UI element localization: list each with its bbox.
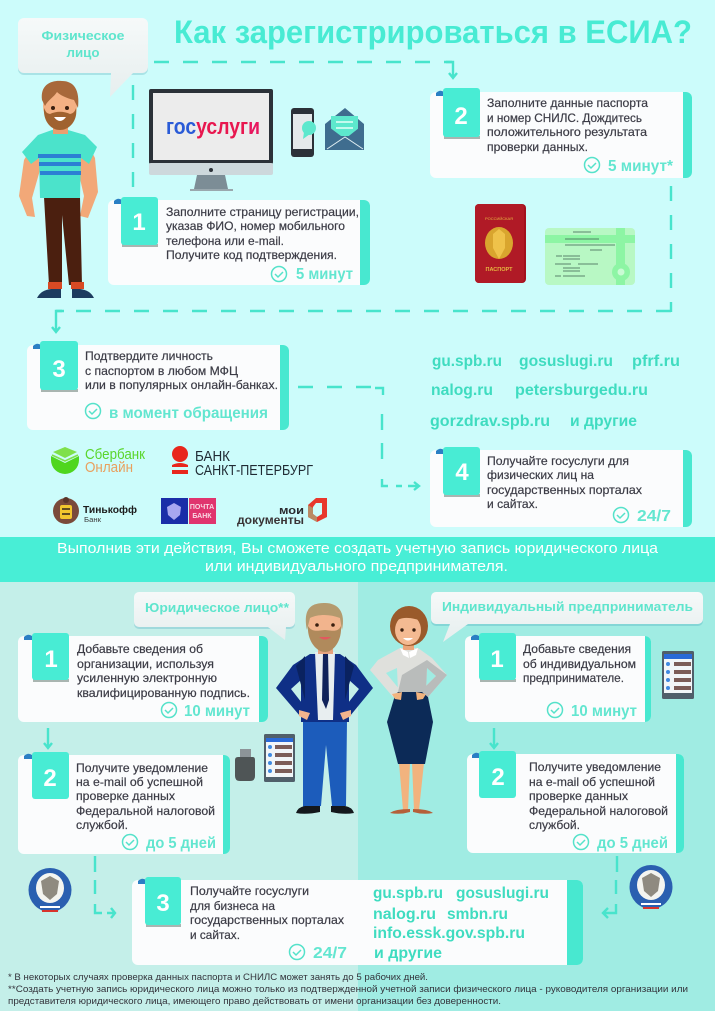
logo: Bank Saint Petersburg: САНКТ-ПЕТЕРБУРГ	[195, 462, 313, 479]
logo: Tinkoff Bank	[53, 497, 137, 524]
panel: step 1: Заполните страницу регистрации,	[166, 205, 359, 219]
list: portals for individuals	[430, 353, 680, 430]
panel: entrepreneur step 1: предпринимателе.	[523, 671, 624, 685]
time: 5 minutes	[272, 266, 353, 283]
panel: legal entity step 2: Получите уведомление	[76, 761, 208, 775]
list: portals for business: и другие	[374, 945, 442, 962]
banner	[0, 537, 715, 582]
footnotes: представителя юридического лица, имеющего право действовать от имени организации без доверенности.	[8, 996, 501, 1007]
logo: Bank Saint Petersburg: БАНК	[195, 448, 230, 465]
panel: final step, business services: 3	[156, 890, 170, 917]
icon: passport: РОССИЙСКАЯ	[485, 216, 513, 221]
emblem: tax service, left	[28, 868, 72, 912]
list: portals for individuals: pfrf.ru	[632, 353, 680, 370]
speech bubble: individual entrepreneur	[431, 592, 703, 642]
section background: individual entrepreneur	[358, 582, 715, 1011]
panel: entrepreneur step 2: на e-mail об успешной	[529, 775, 655, 789]
icon: envelope	[325, 108, 364, 150]
time: 24/7: 24/7	[637, 508, 671, 525]
arrow: entrepreneur step 2 to final step	[603, 856, 617, 918]
panel: entrepreneur step 2: 2	[491, 764, 505, 791]
speech bubble: physical person	[18, 18, 148, 97]
icon: SNILS card	[545, 228, 635, 285]
panel: legal entity step 2: службой.	[76, 818, 128, 832]
speech bubble: legal entity: Юридическое лицо**	[145, 600, 290, 615]
panel: step 1: 1	[132, 209, 146, 236]
panel: entrepreneur step 2: проверке данных	[529, 789, 628, 803]
panel: step 4: Получайте госуслуги для	[487, 454, 629, 468]
panel: step 2: Заполните данные паспорта	[487, 96, 648, 110]
panel: legal entity step 1: организации, используя	[77, 657, 214, 671]
panel: step 3: 3	[52, 356, 66, 383]
logo: Tinkoff Bank: Банк	[84, 517, 102, 524]
list: portals for business: gu.spb.ru	[373, 885, 443, 902]
list: portals for individuals: gu.spb.ru	[432, 353, 502, 370]
logo: Sberbank Online	[51, 446, 145, 476]
panel: step 4	[430, 447, 692, 527]
logo: Bank Saint Petersburg	[172, 446, 313, 479]
list: portals for business: info.essk.gov.spb.ru	[373, 925, 525, 942]
panel: final step, business services: Получайте госуслуги	[190, 884, 309, 898]
panel: step 1: Получите код подтверждения.	[166, 248, 337, 262]
list: portals for individuals: gorzdrav.spb.ru	[430, 413, 550, 430]
logo: Tinkoff Bank: Тинькофф	[83, 504, 137, 516]
panel: step 2	[430, 88, 692, 178]
panel: legal entity step 1: 1	[44, 646, 58, 673]
arrow: step 2 to step 3	[52, 186, 671, 332]
panel: legal entity step 2: 2	[43, 765, 57, 792]
icon: tablet, legal entity	[264, 734, 295, 782]
dashed connector: character to step 1	[132, 85, 134, 192]
arrow: step 3 to step 4	[298, 387, 419, 490]
logo: Pochta Bank: ПОЧТА	[190, 504, 214, 511]
logo: My Documents	[237, 498, 327, 527]
panel: entrepreneur step 2: Получите уведомление	[529, 760, 661, 774]
footnotes: **Создать учетную запись юридического лица можно только из подтвержденной учетной записи физического лица - руководителя организации или	[8, 984, 688, 995]
icon: monitor with gosuslugi logo: госуслуги	[166, 114, 260, 139]
footnotes	[8, 972, 688, 1007]
list: portals for business: nalog.ru	[373, 906, 436, 923]
time: 24/7: 24/7	[313, 945, 347, 962]
title: Как зарегистрироваться в ЕСИА?	[174, 14, 692, 50]
panel: legal entity step 2: Федеральной налоговой	[76, 804, 215, 818]
speech bubble: legal entity	[134, 592, 295, 640]
arrow: legal step 2 to final step	[95, 856, 115, 918]
list: portals for individuals: petersburgedu.ru	[515, 382, 648, 399]
emblem: tax service, right	[630, 865, 672, 909]
panel: step 3	[27, 341, 289, 430]
section background: legal entity	[0, 582, 358, 1011]
speech bubble: physical person: Физическое	[42, 28, 124, 43]
panel: entrepreneur step 2	[467, 751, 684, 853]
panel: final step, business services: государственных порталах	[190, 913, 344, 927]
banner: Выполнив эти действия, Вы сможете создать учетную запись юридического лица	[57, 541, 659, 557]
arrow: entrepreneur step 1 to 2	[490, 728, 498, 748]
logo: Sberbank Online: Сбербанк	[85, 446, 145, 463]
time: up to 5 days	[122, 834, 216, 852]
panel: legal entity step 1: усиленную электронную	[77, 671, 217, 685]
time: 24/7	[614, 508, 671, 525]
panel: legal entity step 2: на e-mail об успешной	[76, 775, 203, 789]
panel: step 3: Подтвердите личность	[85, 349, 213, 363]
panel: entrepreneur step 1: 1	[490, 646, 504, 673]
icon: passport	[475, 204, 526, 283]
panel: final step, business services	[132, 877, 583, 965]
time: at moment of request: в момент обращения	[109, 405, 268, 422]
panel: entrepreneur step 1: Добавьте сведения	[523, 642, 631, 656]
figure: woman in blouse and skirt	[370, 606, 447, 814]
list: portals for individuals: gosuslugi.ru	[519, 353, 613, 370]
logo: Sberbank Online: Онлайн	[85, 459, 133, 476]
panel: step 4: физических лиц на	[487, 468, 594, 482]
panel: step 2: 2	[454, 103, 468, 130]
logo: My Documents: мои	[279, 505, 304, 517]
time: up to 5 days: до 5 дней	[597, 835, 668, 852]
logo: Pochta Bank: БАНК	[192, 513, 212, 520]
panel: legal entity step 2: проверке данных	[76, 789, 175, 803]
list: portals for business: gosuslugi.ru	[456, 885, 549, 902]
icon: USB token	[235, 749, 255, 781]
panel: final step, business services: для бизнеса на	[190, 899, 275, 913]
list: portals for individuals: nalog.ru	[431, 382, 493, 399]
logo: Pochta Bank	[161, 498, 216, 524]
arrow: step 1 to step 2	[154, 62, 457, 78]
logo: My Documents: документы	[237, 513, 304, 527]
list: portals for individuals: и другие	[570, 413, 637, 430]
panel: entrepreneur step 2: службой.	[529, 818, 580, 832]
figure: man in t-shirt	[19, 81, 98, 298]
panel: step 3: или в популярных онлайн-банках.	[85, 378, 278, 392]
list: portals for business: smbn.ru	[447, 906, 508, 923]
panel: step 2: и номер СНИЛС. Дождитесь	[487, 111, 642, 125]
panel: step 2: положительного результата	[487, 125, 647, 139]
icon: passport: ПАСПОРТ	[486, 267, 513, 273]
arrow: legal step 1 to 2	[44, 728, 52, 748]
panel: step 2: проверки данных.	[487, 140, 588, 154]
figure: man in suit	[276, 603, 373, 814]
panel: legal entity step 1: Добавьте сведения об	[77, 642, 203, 656]
panel: step 4: 4	[455, 459, 469, 486]
time: 24/7	[290, 944, 347, 962]
panel: step 1: указав ФИО, номер мобильного	[166, 219, 345, 233]
banner: или индивидуального предпринимателя.	[205, 559, 508, 575]
panel: legal entity step 1: квалифицированную подпись.	[77, 686, 250, 700]
icon: monitor with gosuslugi logo	[149, 89, 273, 191]
time: 10 minutes: 10 минут	[571, 703, 637, 720]
panel: final step, business services: и сайтах.	[190, 928, 240, 942]
panel: entrepreneur step 1: об индивидуальном	[523, 657, 636, 671]
icon: phone with message	[291, 108, 316, 157]
footnotes: * В некоторых случаях проверка данных паспорта и СНИЛС может занять до 5 рабочих дней.	[8, 972, 428, 983]
speech bubble: individual entrepreneur: Индивидуальный предприниматель	[442, 599, 693, 614]
panel: step 4: и сайтах.	[487, 497, 538, 511]
list: portals for business	[373, 885, 549, 962]
time: 5 minutes: 5 минут	[296, 266, 353, 283]
panel: legal entity step 1	[18, 633, 268, 722]
panel: entrepreneur step 2: Федеральной налоговой	[529, 804, 668, 818]
speech bubble: physical person: лицо	[66, 45, 100, 60]
icon: tablet, entrepreneur	[662, 651, 694, 699]
time: 10 minutes: 10 минут	[184, 703, 250, 720]
time: 5 minutes with asterisk: 5 минут*	[608, 158, 674, 175]
panel: step 1	[108, 197, 370, 285]
panel: step 4: государственных порталах	[487, 483, 642, 497]
time: up to 5 days: до 5 дней	[146, 835, 216, 852]
panel: entrepreneur step 1	[465, 633, 651, 722]
panel: step 1: телефона или e-mail.	[166, 234, 284, 248]
panel: step 3: с паспортом в любом МФЦ	[85, 364, 238, 378]
panel: legal entity step 2	[18, 752, 230, 854]
